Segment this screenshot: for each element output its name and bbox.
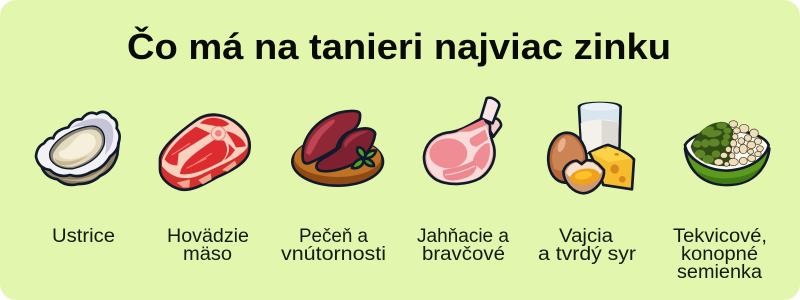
icon: cheese — [589, 145, 634, 189]
title: Čo má na tanieri najviac zinku — [127, 25, 671, 67]
icon: egg — [548, 133, 587, 183]
label: Tekvicové, konopné semienka: Tekvicové, — [673, 226, 767, 247]
label: Vajcia a tvrdý syr — [538, 226, 637, 265]
label: Jahňacie a bravčové — [417, 226, 509, 265]
label: Ustrice: Ustrice — [52, 226, 115, 247]
icon: cracked egg with yolk — [563, 160, 604, 193]
label: Jahňacie a bravčové: bravčové — [422, 244, 505, 265]
label: Pečeň a vnútornosti: Pečeň a — [299, 226, 368, 247]
label: Jahňacie a bravčové: Jahňacie a — [417, 226, 509, 247]
label: Pečeň a vnútornosti: vnútornosti — [281, 244, 386, 265]
label: Tekvicové, konopné semienka: semienka — [677, 262, 762, 283]
icon: milk glass — [579, 103, 621, 153]
label: Vajcia a tvrdý syr: Vajcia — [559, 226, 613, 247]
icon: herb leaves — [352, 147, 376, 168]
label: Hovädzie mäso: mäso — [183, 244, 232, 265]
label: Tekvicové, konopné semienka: konopné — [681, 244, 758, 265]
icon: lamb chop — [424, 98, 501, 184]
label: Pečeň a vnútornosti — [281, 226, 386, 265]
label: Hovädzie mäso — [167, 226, 249, 265]
label: Tekvicové, konopné semienka — [673, 226, 767, 283]
icon: liver on wooden board — [292, 111, 383, 186]
label: Vajcia a tvrdý syr: a tvrdý syr — [538, 244, 637, 265]
icon: bowl with seeds — [685, 121, 769, 185]
icon: oyster — [36, 112, 120, 185]
icon: beef steak — [160, 115, 250, 190]
label: Hovädzie mäso: Hovädzie — [167, 226, 249, 247]
